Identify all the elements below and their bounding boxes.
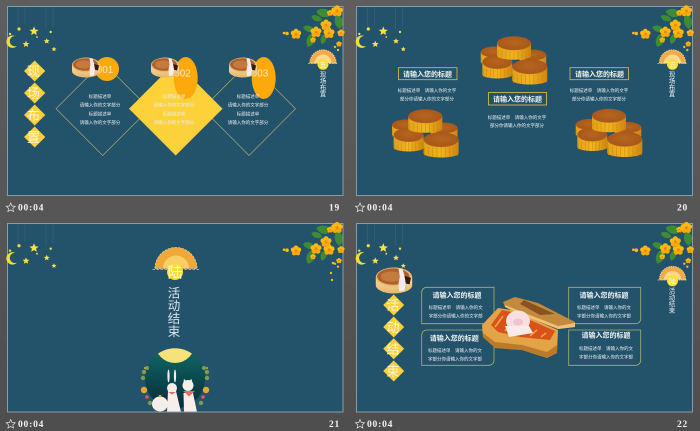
vertical title: 动 (168, 299, 180, 313)
vertical section label: 束 (669, 306, 676, 314)
text block 3: 请输入你的文字部分 (228, 102, 269, 109)
footer: slide 21: 21 (329, 420, 340, 430)
vertical section label: 置 (669, 90, 675, 98)
text block 2: 标题描述单 (163, 93, 186, 100)
panel: slide 19 (6, 5, 345, 195)
text box bottom left: 字部分你请输入你的文字部 (428, 355, 482, 362)
text block 3: 请输入你的文字部分 (228, 119, 269, 126)
numeral: 陆 (167, 264, 183, 282)
vertical diamond heading: 结 (386, 342, 400, 357)
mooncake stack left (392, 109, 459, 158)
text block 3 (228, 93, 269, 126)
text left: 标题描述单 请输入你的文字 (398, 87, 457, 94)
vertical section label: 布 (669, 82, 675, 92)
text center: 标题描述单 请输入你的文字 (488, 114, 547, 121)
text center: 部分你请输入你的文字部分 (490, 122, 544, 129)
icon: fan with numeral: 陆 (669, 276, 676, 286)
text block 1: 请输入你的文字部分 (80, 119, 121, 126)
text right: 部分你请输入你的文字部分 (572, 96, 626, 102)
icon: fan with numeral: 五 (320, 61, 326, 69)
vertical diamond heading: 动 (386, 320, 400, 335)
decoration: moon, stars and flowers (356, 5, 694, 51)
vertical diamond heading (383, 294, 404, 382)
icon: mooncake 1 (72, 58, 100, 78)
text center (488, 114, 547, 129)
text box top left: 字部分你请输入你的文字部 (429, 312, 483, 319)
vertical section label: 动 (669, 294, 675, 302)
vertical diamond heading: 场 (27, 86, 40, 101)
vertical section label: 置 (320, 90, 326, 98)
vertical section label (320, 70, 327, 98)
icon: mooncake 3 (229, 58, 257, 78)
text box bottom right: 字部分你请输入你的文字部 (579, 353, 633, 360)
title box left (398, 68, 457, 80)
text box top right: 标题描述单 请输入你的文 (577, 304, 631, 311)
filled diamond 2 (129, 62, 222, 156)
vertical diamond heading: 束 (386, 364, 400, 379)
vertical diamond heading: 活 (386, 298, 400, 313)
title box right: 请输入您的标题 (575, 70, 624, 78)
text block 2: 请输入你的文字部分 (154, 102, 195, 109)
text block 3: 标题描述单 (237, 93, 260, 100)
text box bottom right (569, 330, 641, 365)
orange oval 002 (174, 57, 198, 99)
text box top right: 字部分你请输入你的文字部 (577, 312, 631, 319)
vertical section label: 场 (320, 76, 326, 85)
icon: large mooncake (376, 268, 412, 294)
text block 1: 标题描述单 (89, 110, 112, 117)
text box bottom right: 请输入您的标题 (582, 330, 630, 340)
illustration: pastry with rabbit (482, 297, 575, 358)
text box bottom left (422, 330, 494, 365)
vertical diamond heading: 布 (27, 108, 40, 123)
vertical section label (669, 286, 676, 314)
vertical diamond heading: 现 (27, 64, 40, 79)
title box left: 请输入您的标题 (403, 70, 452, 78)
mooncake stack top (481, 36, 547, 85)
footer: slide 22: 22 (677, 420, 688, 430)
orange oval 003 (252, 57, 276, 99)
mooncake stack right (576, 109, 642, 157)
icon: large fan (152, 248, 199, 280)
text right (570, 87, 629, 102)
icon: fan with numeral: 五 (669, 61, 676, 69)
vertical title: 活 (168, 286, 180, 300)
icon: fan with numeral (658, 266, 688, 286)
text box bottom left: 标题描述单 请输入你的文 (428, 347, 482, 354)
vertical title (168, 286, 181, 339)
title box center (488, 92, 546, 105)
text left: 部分你请输入你的文字部分 (400, 96, 454, 102)
icon: fan with numeral (308, 50, 338, 70)
vertical section label (669, 70, 676, 98)
panel: slide 22 (356, 222, 694, 412)
footer: slide 19 (6, 203, 340, 214)
orange oval 003: 003 (252, 68, 269, 80)
footer: slide 21: 00:04 (18, 420, 44, 430)
vertical section label: 现 (320, 70, 327, 78)
vertical diamond heading: 置 (27, 130, 40, 145)
footer: slide 22 (356, 420, 688, 430)
text box bottom left: 请输入您的标题 (430, 334, 479, 342)
panel: slide 21 (6, 222, 345, 412)
decoration: moon, stars and flowers (6, 222, 345, 268)
vertical section label: 场 (669, 76, 675, 85)
icon: mooncake 2 (151, 58, 179, 78)
footer: slide 22: 00:04 (367, 420, 393, 430)
text box top right (569, 287, 641, 324)
icon: fan with numeral (658, 50, 688, 70)
vertical title: 结 (168, 312, 180, 326)
orange circle 001: 001 (97, 65, 114, 76)
text block 1: 请输入你的文字部分 (80, 102, 121, 109)
text block 2: 标题描述单 (163, 110, 186, 117)
outline diamond 3 (202, 62, 296, 156)
footer: slide 19: 00:04 (18, 204, 44, 214)
vertical section label: 现 (669, 70, 676, 78)
footer: slide 21 (6, 420, 340, 430)
scattered petals (330, 262, 334, 281)
vertical title: 束 (168, 325, 181, 339)
decoration: moon, stars and flowers (356, 222, 694, 268)
orange oval 002: 002 (174, 68, 191, 80)
footer: slide 19: 19 (329, 204, 340, 214)
text box top right: 请输入您的标题 (580, 290, 628, 300)
text block 3: 标题描述单 (237, 110, 260, 117)
footer: slide 20: 00:04 (367, 204, 393, 214)
title box right (570, 68, 628, 80)
text block 1: 标题描述单 (89, 93, 112, 100)
decoration: moon, stars and flowers (6, 5, 345, 51)
vertical section label: 活 (669, 286, 676, 295)
orange circle 001 (95, 57, 119, 81)
illustration: rabbits under moon (140, 348, 210, 412)
title box center: 请输入您的标题 (493, 94, 542, 104)
outline diamond 1 (56, 62, 150, 156)
text box top left: 请输入您的标题 (432, 290, 482, 300)
text block 2 (154, 93, 195, 126)
text left (398, 87, 457, 102)
text box bottom right: 标题描述单 请输入你的文 (579, 345, 633, 352)
text box top left: 标题描述单 请输入你的文 (429, 304, 483, 311)
panel: slide 20 (356, 5, 694, 195)
footer: slide 20 (356, 203, 688, 214)
vertical section label: 布 (320, 82, 326, 92)
text box top left (422, 287, 494, 324)
text block 1 (80, 93, 121, 126)
vertical section label: 结 (669, 299, 675, 308)
footer: slide 20: 20 (677, 204, 688, 214)
vertical diamond heading (24, 60, 45, 148)
text block 2: 请输入你的文字部分 (154, 119, 195, 126)
text right: 标题描述单 请输入你的文字 (570, 87, 629, 94)
